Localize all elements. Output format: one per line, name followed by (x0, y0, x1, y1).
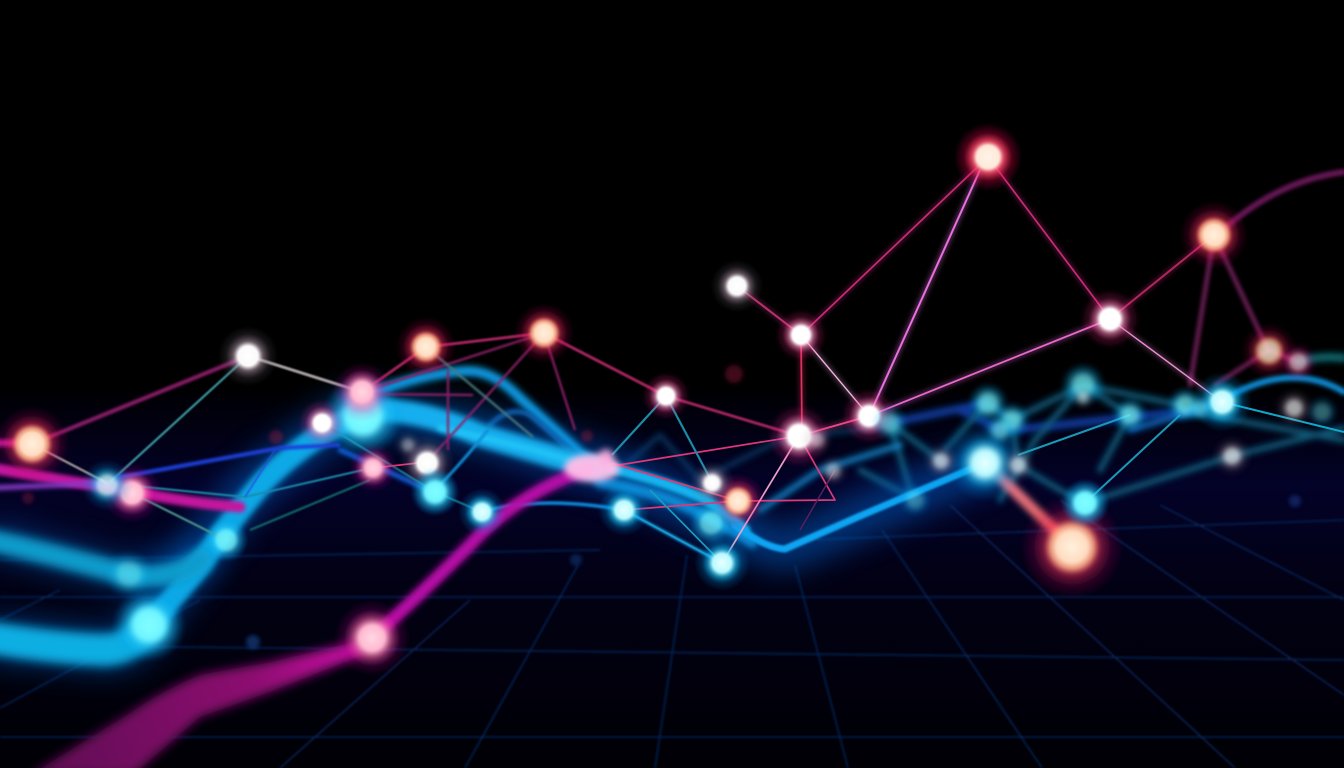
links: right cyan group (1018, 402, 1344, 503)
magenta ribbons (0, 443, 590, 768)
right strand (1222, 378, 1344, 400)
strands after junction (610, 468, 745, 530)
upper left magenta (0, 466, 240, 507)
links: upper right group (737, 157, 1222, 436)
node: large orange (1020, 495, 1124, 599)
node: large cyan hub bottom-left (113, 589, 185, 661)
dim magenta links (1190, 235, 1298, 385)
small white-pink nodes (775, 309, 827, 361)
stub to orange node (0, 440, 30, 446)
orange nodes (0, 406, 70, 482)
thin network lines (32, 157, 1344, 563)
upper right magenta arc (1225, 172, 1344, 228)
rising magenta (375, 468, 590, 635)
orange tail to large node (1000, 477, 1060, 535)
lower blue curve (482, 503, 722, 563)
purple band (0, 482, 130, 488)
blurred blue lines (890, 403, 1180, 430)
upper arc (350, 371, 590, 462)
links: left group (32, 356, 482, 540)
cyan ribbons (0, 371, 1344, 650)
blurred teal web (860, 385, 1344, 503)
second ribbon (0, 538, 200, 576)
ribbon haze (0, 410, 985, 650)
blue left band (340, 450, 435, 493)
links: centre pink group (362, 333, 835, 563)
tail to valley and rise (735, 463, 985, 549)
node: large cyan hub left (323, 376, 403, 456)
cyan nodes (694, 535, 750, 591)
inner dim arc (490, 412, 578, 458)
node: pink junction (564, 449, 620, 482)
lower thick ribbon (0, 622, 150, 650)
dim centre web (620, 425, 890, 480)
lower magenta band (30, 641, 365, 768)
main thick strand (365, 410, 595, 468)
right teal arc (1298, 357, 1344, 362)
main strand highlight (440, 428, 590, 466)
node: pink on magenta ribbon (334, 600, 410, 676)
nodes (0, 123, 1338, 676)
node: large cyan hub right (947, 425, 1023, 501)
node: cyan dim left (105, 550, 153, 598)
floor grid (0, 500, 1344, 768)
distant blurred background lines (620, 172, 1344, 503)
blurred distant nodes (22, 363, 1338, 649)
inner kink (435, 430, 488, 490)
rising ribbon (150, 412, 365, 625)
node: top red (954, 123, 1022, 191)
